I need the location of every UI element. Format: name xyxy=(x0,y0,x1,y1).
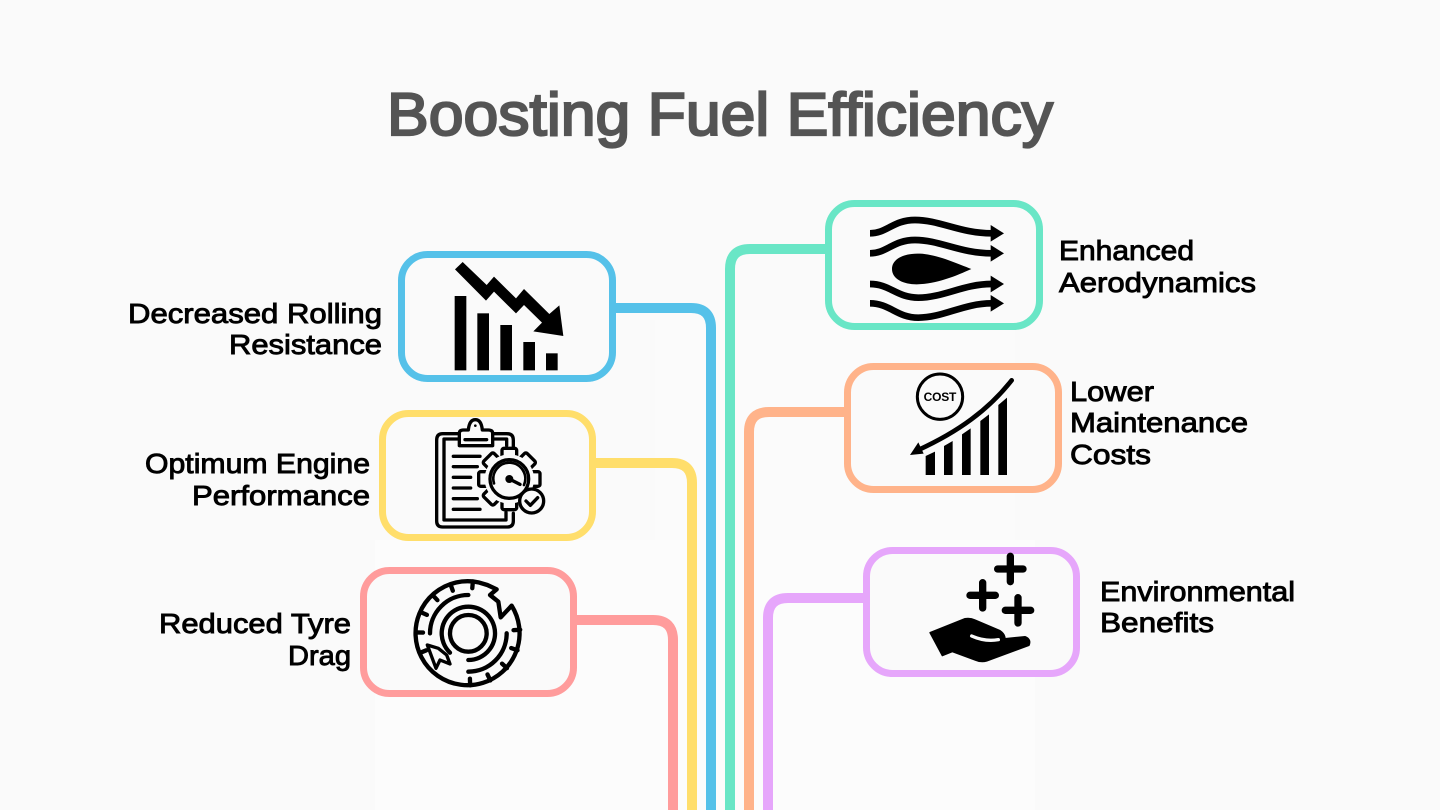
icon: cost chart with downward arrow xyxy=(910,374,1012,475)
icon: cost chart with downward arrow: COST xyxy=(924,390,957,404)
text: lower maintenance costs: Lower xyxy=(1070,376,1154,407)
panel: decreased rolling resistance xyxy=(402,254,612,378)
icon: airflow around wing xyxy=(870,220,1004,318)
connector: environmental benefits xyxy=(768,598,863,810)
text: enhanced aerodynamics: Enhanced xyxy=(1059,235,1194,266)
panel: enhanced aerodynamics xyxy=(828,204,1040,326)
text: lower maintenance costs xyxy=(1070,376,1248,470)
text: environmental benefits: Environmental xyxy=(1100,576,1295,607)
text: environmental benefits: Benefits xyxy=(1100,607,1214,638)
text: decreased rolling resistance: Decreased Rolling xyxy=(128,298,382,329)
text: reduced tyre drag: Drag xyxy=(288,640,351,671)
text: environmental benefits xyxy=(1100,576,1295,638)
connector: rolling resistance xyxy=(616,308,711,810)
text: reduced tyre drag: Reduced Tyre xyxy=(159,608,351,639)
text: enhanced aerodynamics: Aerodynamics xyxy=(1059,267,1256,298)
text: lower maintenance costs: Maintenance xyxy=(1070,407,1248,438)
panel: lower maintenance costs xyxy=(848,366,1058,490)
connector: maintenance costs xyxy=(749,412,844,810)
icon: falling bar chart with arrow xyxy=(455,262,563,370)
text: reduced tyre drag xyxy=(159,608,351,671)
connector: tyre drag xyxy=(577,620,673,810)
text: lower maintenance costs: Costs xyxy=(1070,439,1151,470)
title: Boosting Fuel Efficiency xyxy=(387,81,1053,148)
text: optimum engine performance xyxy=(145,448,370,511)
connector: aerodynamics xyxy=(730,249,825,810)
icon: clipboard with gear gauge xyxy=(437,420,544,527)
panel: optimum engine performance xyxy=(382,414,592,538)
text: optimum engine performance: Optimum Engine xyxy=(145,448,370,479)
icon: hand with plus signs xyxy=(930,556,1031,662)
connector: engine performance xyxy=(596,463,692,810)
icon: damaged tyre xyxy=(416,581,520,685)
panel: environmental benefits xyxy=(866,550,1076,674)
text: decreased rolling resistance: Resistance xyxy=(229,329,382,360)
panel: reduced tyre drag xyxy=(364,570,574,694)
text: enhanced aerodynamics xyxy=(1059,235,1256,298)
text: optimum engine performance: Performance xyxy=(192,480,370,511)
text: decreased rolling resistance xyxy=(128,298,382,360)
